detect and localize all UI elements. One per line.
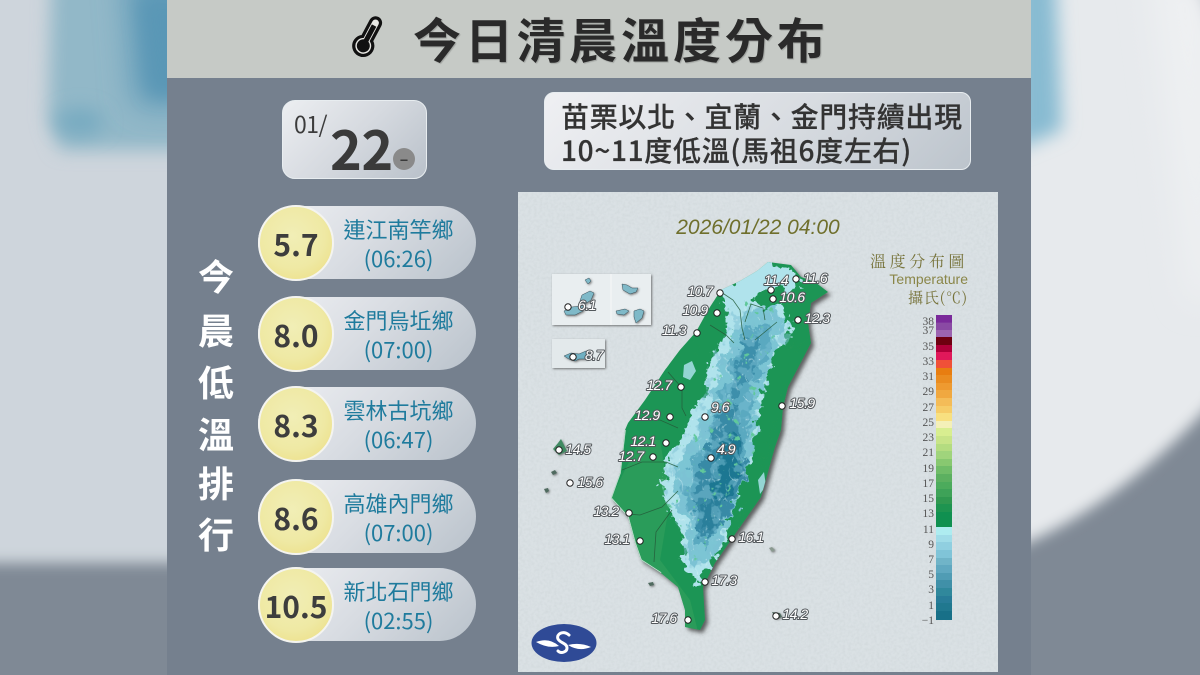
date box: 01/: [294, 106, 327, 140]
ranking item 1: (06:26): [364, 242, 433, 274]
icon: thermometer: [352, 16, 382, 57]
lighter plains: [610, 440, 700, 640]
station readings: 14.5: [565, 441, 591, 457]
legend colour scale: 25: [922, 417, 934, 429]
station readings: 15.6: [577, 474, 603, 490]
dendritic texture of the mountain zone: [660, 300, 793, 578]
ranking item 3: 8.3: [273, 402, 319, 446]
ranking item 3: 雲林古坑鄉: [343, 394, 454, 426]
ranking item 4: 高雄內門鄉: [343, 487, 454, 519]
legend title: 攝氏(℃): [908, 287, 968, 308]
legend colour scale: 1: [928, 600, 934, 612]
ranking item 4: (07:00): [364, 516, 433, 548]
inset: Kinmen: 8.7: [585, 347, 605, 363]
inset: Matsu islands: [552, 274, 651, 325]
legend colour scale: 38: [922, 316, 934, 328]
station readings: 11.6: [803, 270, 828, 286]
legend colour scale: 37: [922, 325, 934, 337]
legend colour scale: 11: [923, 524, 934, 536]
legend colour scale: 29: [922, 386, 934, 398]
county borders: [615, 292, 777, 562]
temperature map panel: [518, 192, 998, 672]
station readings: 16.1: [738, 529, 764, 545]
station readings: 14.2: [782, 606, 808, 622]
ranking item 2: [258, 297, 476, 370]
main panel background: [167, 0, 1031, 675]
ranking item 4: [258, 480, 476, 553]
legend colour scale: 35: [922, 341, 934, 353]
ranking item 1: 連江南竿鄉: [343, 213, 454, 245]
headline callout: [544, 92, 971, 170]
station readings: 12.9: [634, 407, 660, 423]
east rift valley and green patches: [660, 286, 806, 525]
station readings: 12.7: [646, 377, 673, 393]
ranking item 2: (07:00): [364, 333, 433, 365]
legend colour scale: 31: [922, 371, 934, 383]
station readings: 9.6: [711, 399, 730, 415]
date box: 22: [330, 107, 393, 186]
legend colour scale: 17: [922, 478, 934, 490]
station readings: 15.9: [789, 395, 815, 411]
ranking item 5: [258, 568, 476, 641]
legend colour scale: 21: [922, 447, 934, 459]
legend colour scale: 7: [928, 554, 934, 566]
inset: Kinmen: [552, 339, 605, 368]
legend colour scale: 9: [928, 539, 934, 551]
legend colour scale: 27: [922, 402, 934, 414]
station readings: 4.9: [717, 441, 736, 457]
station readings: 11.4: [764, 272, 789, 288]
Taiwan main island: [611, 262, 833, 636]
legend colour scale: 13: [922, 508, 934, 520]
vertical heading: lowest temperatures this morning: 行: [198, 507, 234, 559]
map paper background: [518, 192, 998, 672]
date box: [282, 100, 427, 179]
legend colour scale: 19: [922, 463, 934, 475]
station readings: 12.1: [630, 433, 656, 449]
ranking item 4: 8.6: [273, 495, 319, 539]
legend colour scale: [922, 315, 952, 627]
white sandy coast flecks: [611, 430, 661, 573]
date box: –: [400, 146, 408, 170]
legend colour scale: 3: [928, 584, 934, 596]
vertical heading: lowest temperatures this morning: 今: [198, 249, 234, 301]
station readings: 17.6: [651, 610, 677, 626]
logo: Central Weather Administration: [532, 624, 596, 662]
legend title: 溫度分布圖: [870, 249, 968, 272]
station readings: 10.7: [687, 283, 714, 299]
ranking item 2: 金門烏坵鄉: [343, 304, 454, 336]
station readings: 13.2: [593, 503, 619, 519]
station readings: 10.9: [682, 302, 708, 318]
station readings: 12.7: [618, 448, 645, 464]
outlying islands: [544, 439, 782, 619]
station readings: [556, 270, 830, 626]
station readings: 17.3: [711, 572, 737, 588]
headline callout: 苗栗以北、宜蘭、金門持續出現: [561, 96, 963, 136]
legend colour scale: −1: [922, 615, 934, 627]
ranking item 2: 8.0: [273, 312, 319, 356]
timestamp: 2026/01/22 04:00: [675, 216, 840, 239]
ranking item 5: (02:55): [364, 604, 433, 636]
vertical heading: lowest temperatures this morning: 晨: [198, 303, 234, 355]
station readings: 12.3: [804, 310, 830, 326]
ranking item 1: [258, 206, 476, 279]
ranking item 5: 10.5: [265, 583, 327, 627]
vertical heading: lowest temperatures this morning: [198, 249, 234, 559]
legend colour scale: 15: [922, 493, 934, 505]
ranking item 3: (06:47): [364, 423, 433, 455]
legend title: [870, 249, 968, 308]
legend colour scale: 33: [922, 356, 934, 368]
headline callout: 10~11度低溫(馬祖6度左右): [561, 130, 912, 170]
ranking item 5: 新北石門鄉: [343, 575, 454, 607]
ranking item 1: 5.7: [273, 221, 319, 265]
vertical heading: lowest temperatures this morning: 低: [198, 355, 234, 407]
header band: [167, 0, 1031, 78]
title: 今日清晨溫度分布: [413, 2, 829, 72]
legend colour scale: 23: [922, 432, 934, 444]
station readings: 11.3: [662, 322, 687, 338]
station readings: 10.6: [779, 289, 805, 305]
legend title: Temperature: [889, 271, 968, 287]
vertical heading: lowest temperatures this morning: 排: [198, 456, 234, 508]
vertical heading: lowest temperatures this morning: 溫: [198, 407, 234, 459]
ranking item 3: [258, 387, 476, 460]
station readings: 13.1: [604, 531, 630, 547]
inset: Matsu islands: 6.1: [578, 297, 596, 313]
legend colour scale: 5: [928, 569, 934, 581]
